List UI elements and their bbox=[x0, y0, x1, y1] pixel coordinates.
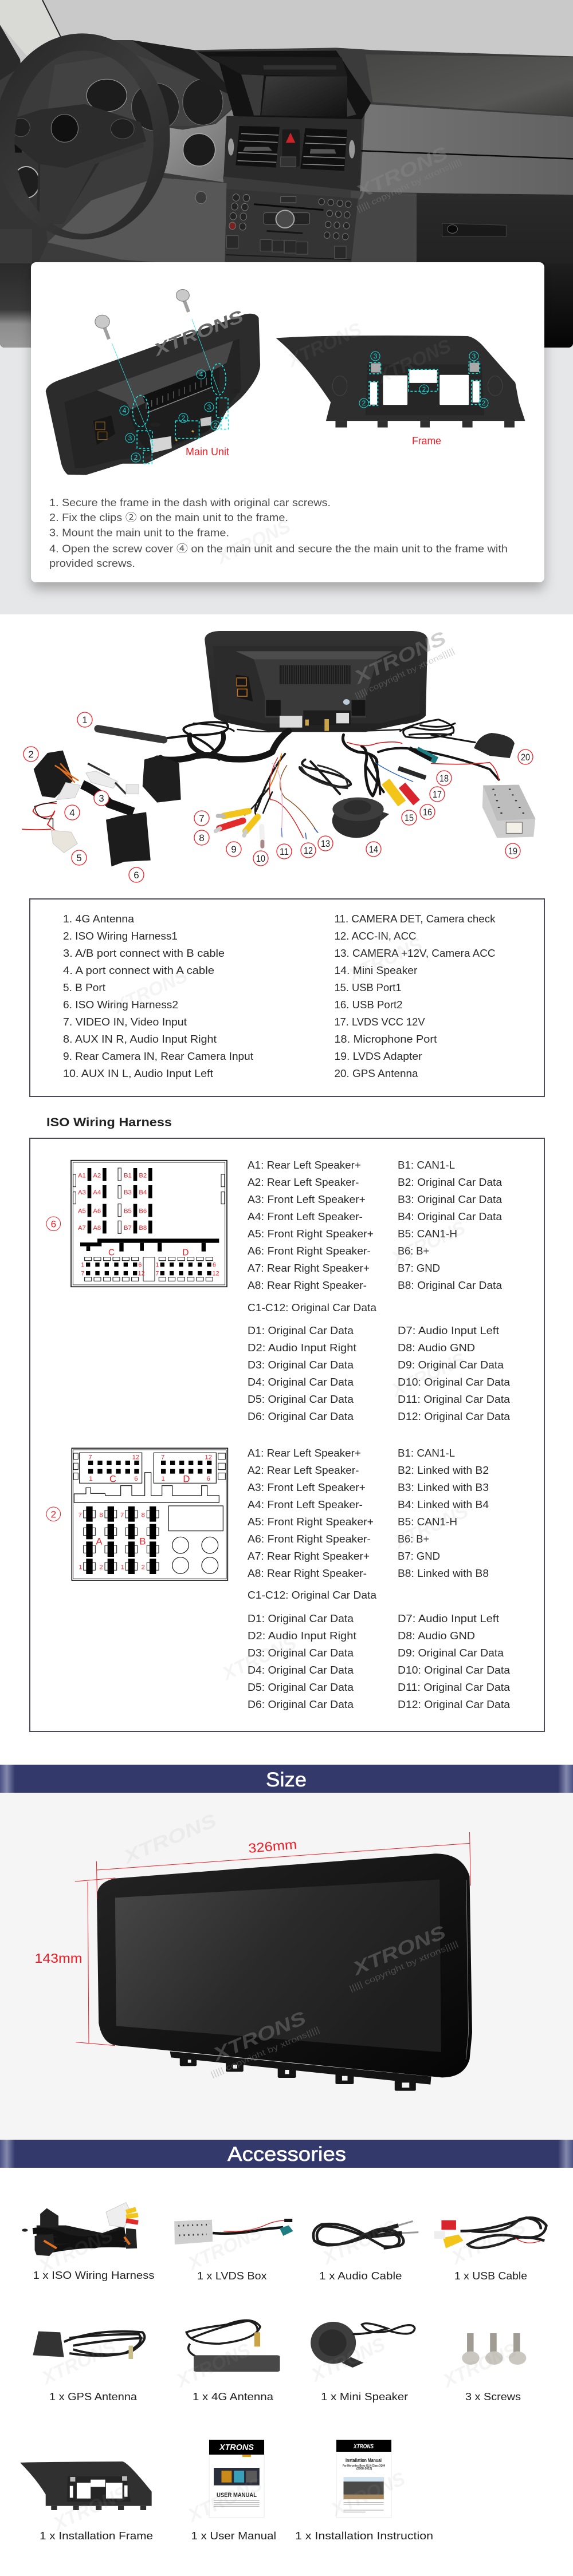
mounting clips bbox=[170, 2052, 431, 2091]
pin list for connector 2: B5: CAN1-H bbox=[398, 1516, 457, 1528]
pin list for connector 2: A7: Rear Right Speaker+ bbox=[248, 1551, 370, 1562]
item: LVDS box bbox=[174, 2219, 293, 2282]
parts list right column: 15. USB Port1 bbox=[335, 982, 401, 993]
connector 6 diagram: C bbox=[108, 1248, 115, 1257]
pin list for connector 6: D8: Audio GND bbox=[398, 1342, 475, 1354]
connector 2 diagram: 12 bbox=[132, 1454, 139, 1461]
cyan callout numbers bbox=[120, 352, 488, 462]
numbered red callouts: 11 bbox=[280, 846, 289, 857]
parts list left column bbox=[63, 913, 253, 1079]
numbered red callouts: 19 bbox=[508, 846, 517, 857]
numbered red callouts: 9 bbox=[231, 844, 237, 855]
accessories grid: XTRONS bbox=[439, 2339, 520, 2392]
device front view with dimensions: ||||| copyright by xtrons||||| bbox=[209, 2025, 321, 2079]
numbered red callouts: 10 bbox=[256, 853, 265, 864]
connector 2 diagram: 7 bbox=[120, 1512, 124, 1518]
parts list left column: 7. VIDEO IN, Video Input bbox=[63, 1016, 187, 1028]
callout 2: 2 bbox=[51, 1509, 56, 1520]
numbered red callouts: 20 bbox=[521, 752, 530, 763]
watermark on hero bbox=[351, 142, 463, 214]
pin list for connector 2: D8: Audio GND bbox=[398, 1630, 475, 1642]
connector 2 diagram: B bbox=[139, 1536, 146, 1547]
pin list for connector 6: A2: Rear Left Speaker- bbox=[248, 1177, 359, 1188]
accessories grid: XTRONS bbox=[184, 2222, 265, 2274]
connector 6 diagram bbox=[71, 1161, 227, 1287]
numbered red callouts: 2 bbox=[28, 749, 34, 760]
connector 2 diagram: 7 bbox=[88, 1454, 92, 1461]
pin list for connector 2: B7: GND bbox=[398, 1551, 440, 1562]
accessories grid: XTRONS bbox=[327, 2468, 409, 2520]
item: LVDS box: 1 x LVDS Box bbox=[197, 2270, 267, 2282]
installation steps text bbox=[49, 497, 508, 569]
connector 6 diagram: A7 bbox=[78, 1225, 86, 1232]
item: mini speaker bbox=[311, 2322, 415, 2403]
numbered red callouts: 13 bbox=[321, 838, 330, 849]
watermark on hero: ||||| copyright by xtrons||||| bbox=[355, 157, 463, 214]
panel: installation steps: XTRONS bbox=[284, 318, 365, 371]
label: main unit: Main Unit bbox=[186, 446, 229, 457]
pin list for connector 2: B3: Linked with B3 bbox=[398, 1482, 489, 1493]
pin list for connector 2: B2: Linked with B2 bbox=[398, 1465, 489, 1476]
item: installation instruction: 1 x Installation Instruction bbox=[295, 2530, 433, 2542]
connector 6 diagram: B3 bbox=[124, 1189, 132, 1196]
parts list left column: 5. B Port bbox=[63, 982, 105, 993]
parts list left column: 9. Rear Camera IN, Rear Camera Input bbox=[63, 1051, 253, 1062]
parts list right column: 11. CAMERA DET, Camera check bbox=[335, 913, 496, 925]
connector 6 diagram: B6 bbox=[139, 1208, 147, 1215]
dimension lines bbox=[75, 1832, 470, 2046]
parts list right column: 14. Mini Speaker bbox=[335, 965, 417, 976]
connector 2 diagram: 12 bbox=[205, 1454, 212, 1461]
item: audio cable bbox=[313, 2221, 418, 2282]
connector 6 diagram: 12 bbox=[138, 1271, 145, 1277]
item: installation instruction: XTRONS bbox=[353, 2443, 374, 2450]
connector 6 diagram: 12 bbox=[213, 1271, 219, 1277]
connector 6 diagram: B4 bbox=[139, 1189, 147, 1196]
installation steps text: provided screws. bbox=[49, 558, 135, 569]
item: mini speaker: 1 x Mini Speaker bbox=[321, 2391, 408, 2403]
pin list for connector 6: B4: Original Car Data bbox=[398, 1211, 503, 1222]
pin list for connector 2: D5: Original Car Data bbox=[248, 1682, 354, 1693]
label: width: 326mm bbox=[248, 1837, 297, 1856]
pin list for connector 6: A3: Front Left Speaker+ bbox=[248, 1194, 366, 1205]
device front view with dimensions: XTRONS bbox=[209, 2007, 309, 2065]
accessories grid: XTRONS bbox=[172, 2339, 254, 2392]
pin list for connector 6: D11: Original Car Data bbox=[398, 1394, 511, 1405]
panel: parts list bbox=[30, 899, 544, 1096]
left seat strip bbox=[0, 263, 31, 348]
display body bbox=[97, 1853, 472, 2077]
cyan callout numbers: 2 bbox=[422, 385, 426, 393]
GPS antenna body bbox=[474, 733, 515, 758]
item: USB cable bbox=[434, 2218, 546, 2282]
label: frame: Frame bbox=[412, 435, 441, 447]
4G antenna bbox=[98, 729, 164, 740]
pin list for connector 2: D9: Original Car Data bbox=[398, 1647, 504, 1659]
numbered red callouts: 7 bbox=[199, 813, 205, 824]
item: audio cable: 1 x Audio Cable bbox=[319, 2270, 402, 2282]
pin list for connector 2: D2: Audio Input Right bbox=[248, 1630, 356, 1642]
numbered red callouts: 14 bbox=[369, 844, 378, 855]
item: installation instruction bbox=[295, 2440, 433, 2542]
pin list for connector 6: D1: Original Car Data bbox=[248, 1325, 354, 1336]
right dash strip bbox=[544, 263, 573, 348]
panel: wiring harness pinouts: XTRONS bbox=[390, 1500, 472, 1553]
heading: Accessories: Accessories bbox=[227, 2143, 346, 2165]
pin list for connector 2: D10: Original Car Data bbox=[398, 1664, 511, 1676]
connector 6 diagram: B1 bbox=[124, 1172, 132, 1179]
cyan callout numbers: 3 bbox=[472, 352, 476, 360]
mini speaker bbox=[332, 798, 389, 838]
connector 6 diagram: B8 bbox=[139, 1225, 147, 1232]
panel: wiring harness pinouts: XTRONS bbox=[387, 1348, 469, 1401]
pin list for connector 6: B6: B+ bbox=[398, 1245, 429, 1257]
installation steps text: 1. Secure the frame in the dash with original car screws. bbox=[49, 497, 331, 508]
product parts photo: XTRONS bbox=[350, 627, 449, 688]
connector 2 diagram: 1 bbox=[121, 1564, 124, 1571]
item: GPS antenna: 1 x GPS Antenna bbox=[49, 2391, 138, 2403]
parts list right column: 20. GPS Antenna bbox=[335, 1068, 419, 1079]
connector 6 diagram: A2 bbox=[93, 1172, 101, 1179]
pin list for connector 6: C1-C12: Original Car Data bbox=[248, 1302, 377, 1313]
cables bbox=[157, 720, 499, 838]
cyan callout numbers: 4 bbox=[123, 407, 127, 415]
accessories grid: XTRONS bbox=[184, 2474, 265, 2526]
item: 4G antenna: 1 x 4G Antenna bbox=[193, 2391, 274, 2403]
parts list right column bbox=[335, 913, 496, 1079]
connector 6 diagram: A3 bbox=[78, 1189, 86, 1196]
accessories grid: XTRONS bbox=[448, 2216, 529, 2269]
item: installation frame: 1 x Installation Frame bbox=[40, 2530, 153, 2542]
item: screws: 3 x Screws bbox=[465, 2391, 521, 2403]
pin list for connector 6: D6: Original Car Data bbox=[248, 1411, 354, 1422]
cyan callout numbers: 3 bbox=[374, 352, 378, 360]
pin list for connector 2: D1: Original Car Data bbox=[248, 1613, 354, 1624]
pin list for connector 6: D10: Original Car Data bbox=[398, 1376, 511, 1388]
device front view with dimensions bbox=[34, 1809, 472, 2091]
heading: Size: Size bbox=[266, 1769, 307, 1791]
accessories grid: XTRONS bbox=[38, 2336, 119, 2389]
item: user manual: 1 x User Manual bbox=[191, 2530, 276, 2542]
heading: ISO wiring harness: ISO Wiring Harness bbox=[46, 1116, 172, 1129]
numbered red callouts: 4 bbox=[69, 807, 75, 818]
pin list for connector 2: A2: Rear Left Speaker- bbox=[248, 1465, 359, 1476]
panel: parts list: XTRONS bbox=[344, 933, 426, 986]
item: ISO wiring harness bbox=[22, 2203, 155, 2281]
numbered red callouts: 8 bbox=[199, 833, 205, 843]
item: user manual: XTRONS bbox=[219, 2443, 254, 2452]
connector 6 diagram: B7 bbox=[124, 1225, 132, 1232]
connector 2 diagram: 1 bbox=[79, 1564, 83, 1571]
connector 2 diagram: 8 bbox=[99, 1512, 103, 1518]
pin list for connector 6: B3: Original Car Data bbox=[398, 1194, 503, 1205]
connector 6 diagram: D bbox=[182, 1248, 189, 1257]
cyan callout numbers: 2 bbox=[482, 399, 486, 407]
rear of main unit bbox=[205, 631, 427, 732]
pin list for connector 2: A3: Front Left Speaker+ bbox=[248, 1482, 366, 1493]
connector 6 diagram: 6 bbox=[138, 1262, 142, 1269]
panel: installation steps: XTRONS bbox=[213, 515, 294, 568]
pin list for connector 2: B1: CAN1-L bbox=[398, 1447, 455, 1459]
pin list for connector 2: D7: Audio Input Left bbox=[398, 1613, 499, 1624]
ISO wiring harness 1 bbox=[34, 751, 139, 812]
B port plug and wires bbox=[22, 802, 77, 853]
connector 6 diagram: A4 bbox=[93, 1189, 101, 1196]
callout 6 bbox=[46, 1217, 61, 1231]
pin list for connector 6: D12: Original Car Data bbox=[398, 1411, 511, 1422]
pin list for connector 2: A8: Rear Right Speaker- bbox=[248, 1568, 367, 1579]
connector 2 diagram: 7 bbox=[161, 1454, 164, 1461]
section band: Accessories bbox=[0, 2140, 573, 2168]
panel: installation steps: XTRONS bbox=[373, 335, 454, 388]
connector 2 diagram: 2 bbox=[142, 1564, 145, 1571]
pin list for connector 6: D4: Original Car Data bbox=[248, 1376, 354, 1388]
section band: Size bbox=[0, 1765, 573, 1793]
pin list for connector 6: D3: Original Car Data bbox=[248, 1359, 354, 1371]
accessories grid: XTRONS bbox=[319, 2216, 400, 2269]
item: user manual bbox=[191, 2440, 276, 2542]
product parts photo: ||||| copyright by xtrons||||| bbox=[354, 646, 456, 700]
numbered red callouts: 5 bbox=[76, 853, 82, 863]
connector 6 diagram: B2 bbox=[139, 1172, 147, 1179]
connector 2 diagram: 1 bbox=[162, 1476, 165, 1482]
item: screws bbox=[462, 2333, 526, 2403]
connector 6 diagram: A5 bbox=[78, 1208, 86, 1215]
parts list left column: 3. A/B port connect with B cable bbox=[63, 948, 225, 959]
pin list for connector 6: B7: GND bbox=[398, 1263, 440, 1274]
connector 2 diagram: D bbox=[183, 1474, 190, 1485]
pin list for connector 2: B8: Linked with B8 bbox=[398, 1568, 489, 1579]
main unit illustration bbox=[46, 289, 260, 475]
numbered red callouts: 1 bbox=[82, 715, 88, 725]
pin list for connector 6: D9: Original Car Data bbox=[398, 1359, 504, 1371]
cyan callout numbers: 2 bbox=[362, 399, 366, 407]
cyan callout numbers: 3 bbox=[207, 403, 211, 411]
watermark on hero: XTRONS bbox=[351, 142, 451, 203]
item: installation frame bbox=[20, 2461, 153, 2542]
connector 2 diagram: 6 bbox=[207, 1476, 210, 1482]
connector 2 diagram: C bbox=[109, 1474, 116, 1485]
pin list for connector 6 bbox=[248, 1159, 511, 1422]
A and B connector block bbox=[143, 755, 181, 803]
pin list for connector 6: A5: Front Right Speaker+ bbox=[248, 1228, 374, 1240]
item: 4G antenna bbox=[186, 2320, 280, 2403]
pin list for connector 6: D7: Audio Input Left bbox=[398, 1325, 499, 1336]
hero photo: car dashboard bbox=[0, 0, 573, 351]
connector 6 diagram: 6 bbox=[213, 1262, 216, 1269]
connector 6 diagram: 1 bbox=[155, 1262, 159, 1269]
pin list for connector 6: B1: CAN1-L bbox=[398, 1159, 455, 1171]
connector 6 diagram: 1 bbox=[81, 1262, 84, 1269]
connector 2 diagram: 2 bbox=[99, 1564, 103, 1571]
product parts photo bbox=[22, 627, 535, 882]
callout 2 bbox=[46, 1507, 61, 1521]
parts list right column: 12. ACC-IN, ACC bbox=[335, 930, 416, 942]
cyan callout numbers: 2 bbox=[214, 421, 218, 429]
numbered red callouts bbox=[23, 712, 533, 882]
item: installation instruction: (2008-2012) bbox=[356, 2467, 372, 2471]
connector 2 diagram: A bbox=[96, 1536, 103, 1547]
pin list for connector 2: A5: Front Right Speaker+ bbox=[248, 1516, 374, 1528]
installation steps text: 2. Fix the clips ② on the main unit to the frame. bbox=[49, 512, 288, 523]
item: GPS antenna bbox=[33, 2332, 144, 2403]
pin list for connector 2: D3: Original Car Data bbox=[248, 1647, 354, 1659]
connector 6 diagram: 7 bbox=[155, 1271, 159, 1277]
XTRONS mark on main unit: XTRONS bbox=[150, 307, 246, 360]
item: ISO wiring harness: 1 x ISO Wiring Harness bbox=[33, 2270, 155, 2281]
pin list for connector 6: D2: Audio Input Right bbox=[248, 1342, 356, 1354]
panel: wiring harness pinouts: XTRONS bbox=[387, 1217, 469, 1269]
connector 2 diagram: 8 bbox=[142, 1512, 145, 1518]
panel: installation steps bbox=[31, 262, 544, 582]
pin list for connector 6: A6: Front Right Speaker- bbox=[248, 1245, 371, 1257]
cyan callout numbers: 4 bbox=[199, 370, 203, 378]
pin list for connector 6: A8: Rear Right Speaker- bbox=[248, 1280, 367, 1291]
pin list for connector 6: B2: Original Car Data bbox=[398, 1177, 503, 1188]
RCA connectors bbox=[215, 811, 318, 846]
numbered red callouts: 3 bbox=[99, 793, 104, 804]
pin list for connector 2: D12: Original Car Data bbox=[398, 1699, 511, 1710]
pin list for connector 6: B8: Original Car Data bbox=[398, 1280, 503, 1291]
item: user manual: USER MANUAL bbox=[217, 2492, 257, 2499]
pin list for connector 6: B5: CAN1-H bbox=[398, 1228, 457, 1240]
item: installation instruction: For Mercedes-Benz GLK-Class X204 bbox=[343, 2464, 385, 2468]
numbered red callouts: 12 bbox=[304, 845, 313, 856]
parts list left column: 4. A port connect with A cable bbox=[63, 965, 214, 976]
accessories grid: XTRONS bbox=[35, 2224, 116, 2277]
section background: installation bbox=[0, 0, 573, 614]
cyan callout numbers: 3 bbox=[128, 434, 132, 442]
pin list for connector 2: D6: Original Car Data bbox=[248, 1699, 354, 1710]
numbered red callouts: 6 bbox=[134, 870, 139, 881]
panel: wiring harness pinouts bbox=[30, 1138, 544, 1731]
USB and microphone connectors bbox=[386, 748, 437, 803]
pin list for connector 6: A7: Rear Right Speaker+ bbox=[248, 1263, 370, 1274]
pin list for connector 2: B6: B+ bbox=[398, 1533, 429, 1545]
connector 6 diagram: A1 bbox=[78, 1172, 86, 1179]
device front view with dimensions: XTRONS bbox=[348, 1921, 449, 1979]
connector 2 diagram: 6 bbox=[134, 1476, 138, 1482]
device front view with dimensions: ||||| copyright by xtrons||||| bbox=[348, 1939, 460, 1993]
device front view with dimensions: XTRONS bbox=[119, 1809, 219, 1868]
panel: parts list: XTRONS bbox=[109, 965, 191, 1017]
frame illustration bbox=[276, 336, 525, 428]
pin list for connector 2 bbox=[248, 1447, 511, 1710]
pin list for connector 2: B4: Linked with B4 bbox=[398, 1499, 489, 1510]
pin list for connector 2: A4: Front Left Speaker- bbox=[248, 1499, 363, 1510]
parts list right column: 13. CAMERA +12V, Camera ACC bbox=[335, 948, 495, 959]
pin list for connector 2: C1-C12: Original Car Data bbox=[248, 1589, 377, 1601]
pin list for connector 2: D11: Original Car Data bbox=[398, 1682, 511, 1693]
connector 2 diagram: 1 bbox=[89, 1476, 93, 1482]
parts list right column: 18. Microphone Port bbox=[335, 1033, 437, 1045]
item: installation instruction: Installation Manual bbox=[346, 2457, 382, 2463]
pin list for connector 6: D5: Original Car Data bbox=[248, 1394, 354, 1405]
item: USB cable: 1 x USB Cable bbox=[454, 2270, 527, 2282]
section background: accessories bbox=[0, 2168, 573, 2576]
parts list left column: 6. ISO Wiring Harness2 bbox=[63, 999, 178, 1011]
section background: parts and wiring bbox=[0, 614, 573, 1765]
numbered red callouts: 15 bbox=[405, 812, 414, 823]
LVDS adapter box bbox=[482, 785, 535, 838]
parts illustration bbox=[22, 631, 535, 866]
parts list left column: 10. AUX IN L, Audio Input Left bbox=[63, 1068, 213, 1079]
parts list left column: 1. 4G Antenna bbox=[63, 913, 135, 925]
cyan callout numbers: 2 bbox=[182, 414, 186, 422]
numbered red callouts: 18 bbox=[439, 773, 449, 784]
accessories grid: XTRONS bbox=[49, 2482, 131, 2535]
connector 2 diagram: 7 bbox=[79, 1512, 82, 1518]
callout 6: 6 bbox=[51, 1218, 56, 1230]
parts list left column: 2. ISO Wiring Harness1 bbox=[63, 930, 178, 942]
section background: size bbox=[0, 1793, 573, 2140]
pin list for connector 6: A4: Front Left Speaker- bbox=[248, 1211, 363, 1222]
installation steps text: 3. Mount the main unit to the frame. bbox=[49, 527, 229, 538]
parts list left column: 8. AUX IN R, Audio Input Right bbox=[63, 1033, 217, 1045]
connector 2 diagram bbox=[72, 1448, 227, 1580]
connector 6 diagram: A8 bbox=[93, 1225, 101, 1232]
numbered red callouts: 17 bbox=[433, 789, 442, 800]
connector 6 diagram: A6 bbox=[93, 1208, 101, 1215]
pin list for connector 2: A6: Front Right Speaker- bbox=[248, 1533, 371, 1545]
accessories grid bbox=[20, 2203, 546, 2542]
accessories grid: XTRONS bbox=[307, 2333, 388, 2386]
ISO wiring harness 2 bbox=[106, 812, 151, 866]
installation steps text: 4. Open the screw cover ④ on the main unit and secure the the main unit to the frame with bbox=[49, 543, 508, 554]
connector 6 diagram: 7 bbox=[81, 1271, 84, 1277]
connector 6 diagram: B5 bbox=[124, 1208, 132, 1215]
numbered red callouts: 16 bbox=[423, 807, 432, 818]
cyan callout numbers: 2 bbox=[134, 453, 138, 461]
pin list for connector 2: A1: Rear Left Speaker+ bbox=[248, 1447, 361, 1459]
pin list for connector 2: D4: Original Car Data bbox=[248, 1664, 354, 1676]
pin list for connector 6: A1: Rear Left Speaker+ bbox=[248, 1159, 361, 1171]
panel: wiring harness pinouts: XTRONS bbox=[218, 1632, 300, 1685]
label: height: 143mm bbox=[34, 1951, 83, 1966]
parts list right column: 17. LVDS VCC 12V bbox=[335, 1016, 425, 1028]
parts list right column: 16. USB Port2 bbox=[335, 999, 402, 1011]
parts list right column: 19. LVDS Adapter bbox=[335, 1051, 422, 1062]
